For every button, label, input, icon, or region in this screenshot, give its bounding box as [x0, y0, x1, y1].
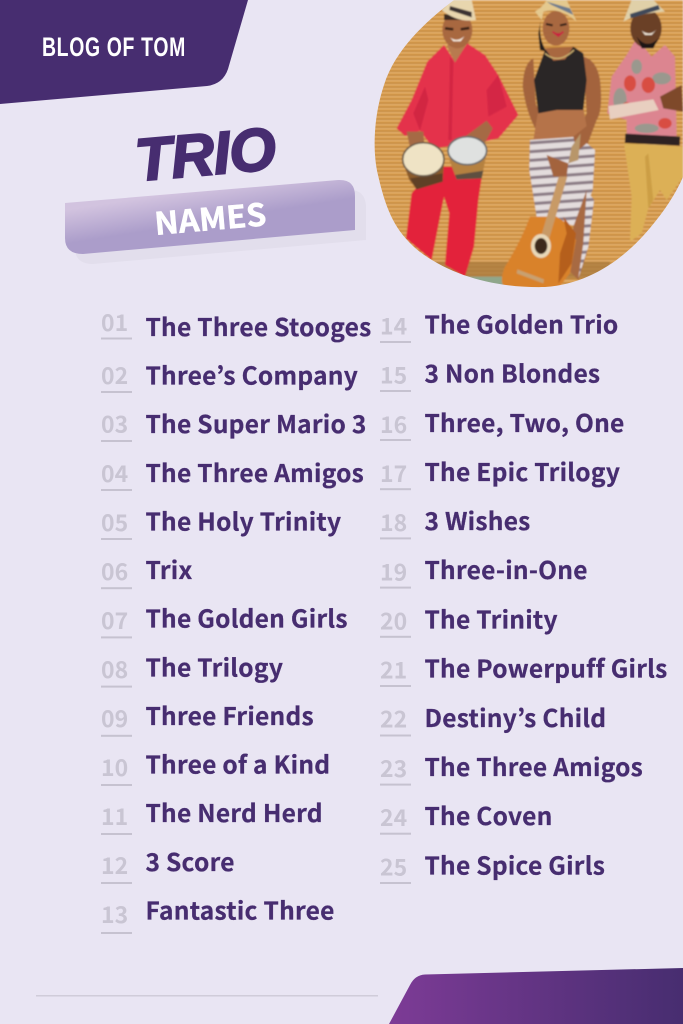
item 11 [101, 795, 323, 835]
item 01: The Three Stooges [146, 309, 372, 344]
item 05: The Holy Trinity [146, 503, 341, 538]
item 07: The Golden Girls [146, 601, 348, 636]
item 22: 22 [380, 701, 407, 735]
item 23: The Three Amigos [424, 749, 643, 784]
list column 1 [101, 304, 372, 934]
item 25: The Spice Girls [424, 847, 605, 882]
item 10: 10 [101, 749, 128, 783]
woman [522, 58, 539, 128]
item 13: 13 [101, 896, 128, 930]
footer corner shape [389, 968, 683, 1024]
list column 2 [380, 306, 668, 884]
item 18: 18 [380, 504, 407, 538]
item 20: 20 [380, 602, 407, 636]
guitar [502, 217, 576, 290]
item 12: 12 [101, 847, 128, 881]
item 11: 11 [101, 798, 128, 832]
item 19: Three-in-One [424, 552, 588, 587]
item 18: 3 Wishes [424, 503, 531, 538]
footer divider [36, 995, 378, 996]
item 04: 04 [101, 455, 128, 489]
item 07: 07 [101, 602, 128, 636]
item 06 [101, 552, 193, 589]
brand label: Blog of Tom: BLOG OF TOM [42, 32, 185, 62]
item 10: Three of a Kind [146, 746, 330, 781]
item 08: 08 [101, 651, 128, 685]
item 21: The Powerpuff Girls [424, 651, 668, 686]
item 19: 19 [380, 553, 407, 587]
item 24: 24 [380, 799, 407, 833]
man 3 [607, 38, 677, 137]
item 12: 3 Score [146, 844, 235, 879]
item 11: The Nerd Herd [146, 795, 323, 830]
item 04: The Three Amigos [146, 455, 364, 490]
man 1 [406, 167, 483, 277]
bongos [405, 165, 444, 188]
title: Trio: TRIO [132, 115, 279, 194]
item 12 [101, 844, 235, 884]
item 17: The Epic Trilogy [424, 454, 620, 489]
item 06: Trix [146, 552, 193, 587]
item 03: 03 [101, 406, 128, 440]
item 23: 23 [380, 750, 407, 784]
item 15: 15 [380, 357, 407, 391]
item 09: 09 [101, 700, 128, 734]
header banner [0, 0, 248, 104]
item 08: The Trilogy [146, 650, 283, 685]
item 17: 17 [380, 455, 407, 489]
item 18 [380, 503, 531, 539]
item 21: 21 [380, 652, 407, 686]
item 08 [101, 650, 283, 688]
item 14: The Golden Trio [424, 306, 619, 341]
item 02: 02 [101, 357, 128, 391]
item 06: 06 [101, 553, 128, 587]
item 16: 16 [380, 406, 407, 440]
item 24: The Coven [424, 798, 553, 833]
item 22: Destiny’s Child [424, 700, 606, 735]
item 20: The Trinity [424, 601, 558, 636]
item 13 [101, 892, 335, 934]
subtitle ribbon: Names: NAMES [152, 189, 268, 244]
item 05: 05 [101, 504, 128, 538]
item 14: 14 [380, 307, 407, 341]
item 01: 01 [101, 304, 128, 338]
item 03: The Super Mario 3 [146, 406, 367, 441]
photo: three musicians against a corrugated wall [370, 0, 683, 290]
item 09: Three Friends [146, 698, 314, 733]
item 25: 25 [380, 848, 407, 882]
item 13: Fantastic Three [146, 892, 335, 927]
item 15: 3 Non Blondes [424, 356, 600, 391]
item 16: Three, Two, One [424, 405, 625, 440]
subtitle ribbon: Names [65, 180, 366, 264]
item 02: Three’s Company [146, 358, 358, 393]
